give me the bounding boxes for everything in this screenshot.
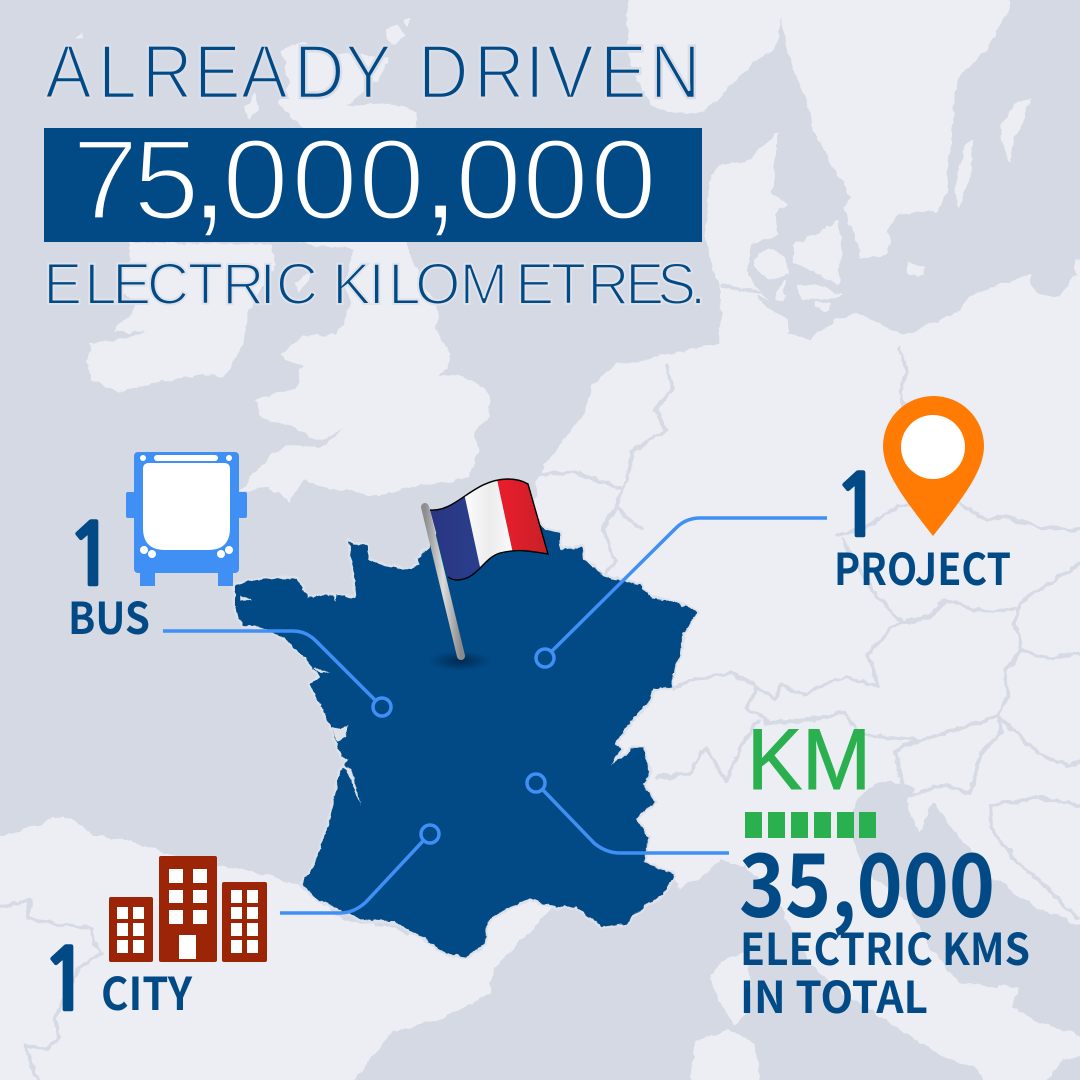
sea: Danish straits <box>747 131 860 339</box>
land: Spain base <box>0 816 494 1080</box>
stat: 1 project: PROJECT <box>834 534 1011 598</box>
icon: bus <box>126 452 247 586</box>
land: Gotland, Oland, Bornholm <box>908 98 1029 276</box>
sea: Adriatic <box>853 781 1080 1040</box>
stat: 1 bus <box>65 513 150 647</box>
land: islands around Scotland <box>78 18 410 293</box>
headline number banner: , <box>189 93 230 249</box>
stat: 35,000 electric kms in total: IN TOTAL <box>740 962 928 1026</box>
icon: location pin <box>883 396 984 536</box>
headline number banner: 75 <box>72 116 200 243</box>
title: already driven: ALREADY DRIVEN <box>45 30 700 115</box>
connector: project <box>536 518 827 667</box>
land: Ireland <box>88 243 275 391</box>
sea: Ionian corner <box>1040 1052 1080 1080</box>
land: Great Britain <box>241 43 491 501</box>
stat: 1 city: 1 <box>40 938 92 1023</box>
icon: city buildings <box>109 856 267 962</box>
headline number banner: 000 <box>455 116 657 243</box>
stat: 1 bus: BUS <box>68 583 150 647</box>
stat: 1 city <box>40 938 193 1023</box>
land: Scandinavia <box>626 0 1010 258</box>
stat: 35,000 electric kms in total: ELECTRIC KMS <box>740 914 1030 978</box>
stat: 35,000 electric kms in total: 35,000 <box>739 816 995 943</box>
headline number banner <box>44 93 702 249</box>
stat: 1 project <box>832 464 1011 598</box>
icon: KM odometer: KM <box>747 712 871 808</box>
stat: 1 project: 1 <box>832 464 884 549</box>
headline number banner: 000 <box>222 116 425 243</box>
land: Corsica and Sardinia <box>690 950 760 1080</box>
sea: Mediterranean <box>344 859 990 1080</box>
stat: 1 city: CITY <box>101 958 193 1023</box>
map of France <box>235 490 697 957</box>
stat: 1 bus: 1 <box>65 513 117 598</box>
connector: kilometres <box>527 774 729 853</box>
stat: 35,000 electric kms in total <box>739 816 1030 1026</box>
headline number banner: , <box>420 93 461 249</box>
connector: bus <box>163 631 391 716</box>
land: Funen and Zealand <box>747 220 842 312</box>
connector: city <box>280 825 439 913</box>
icon: French flag <box>425 470 560 671</box>
subtitle: electric kilometres: ELECTRIC KILOMETRES. <box>43 252 706 317</box>
